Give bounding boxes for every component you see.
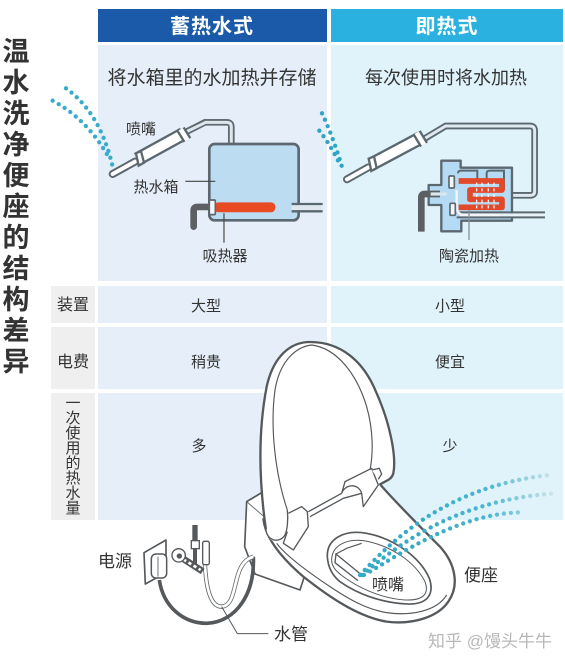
title: 水 — [2, 68, 30, 98]
inner chambers — [458, 171, 504, 190]
lid fill — [260, 342, 394, 543]
row: volume stored — [98, 393, 327, 520]
label: electricity cost: 电费 — [57, 353, 89, 371]
wall socket — [144, 540, 166, 584]
inlet pipe — [194, 207, 210, 227]
panel: stored hot water column — [98, 9, 327, 520]
heater — [214, 202, 275, 212]
nozzle — [113, 162, 135, 174]
label: hot water per use: 一 — [65, 395, 81, 412]
lower left arm — [266, 510, 288, 540]
nozzle — [347, 167, 368, 179]
title: 结 — [2, 254, 30, 284]
seat inner contour — [277, 543, 447, 614]
label: hot water per use: 量 — [65, 500, 81, 517]
label: hot water per use: 热 — [65, 470, 81, 487]
table values: 稍贵 — [191, 354, 221, 371]
table values: 多 — [191, 438, 207, 455]
watermark: 知乎 @馒头牛牛 — [428, 632, 552, 651]
label: hot water per use: 的 — [65, 455, 81, 472]
heater body — [429, 161, 512, 231]
labels: stored diagram: 热水箱 — [133, 179, 179, 196]
label: hot water per use: 次 — [65, 410, 81, 427]
labels: stored diagram — [126, 121, 248, 265]
spray nozzle arm — [335, 554, 362, 581]
seat — [263, 463, 455, 622]
valve — [187, 525, 203, 543]
row: size stored — [98, 286, 327, 323]
label: hot water per use: 水 — [65, 485, 81, 502]
lid inner contour — [273, 345, 372, 510]
title: 构 — [2, 285, 30, 315]
label: nozzle: 喷嘴 — [372, 576, 404, 594]
leader — [222, 607, 268, 634]
table values — [191, 298, 465, 455]
leaders — [185, 181, 224, 243]
column header: stored: 蓄热水式 — [170, 15, 254, 38]
icon: spray dots right — [319, 113, 343, 172]
title: 差 — [2, 316, 30, 346]
label: hot water per use: 使 — [65, 425, 81, 442]
icon: plumbing and power — [144, 525, 268, 634]
power cable — [159, 557, 253, 623]
pillars — [449, 176, 454, 188]
table values: 大型 — [191, 298, 221, 315]
label: device: 装置 — [57, 296, 89, 314]
panel body: instant — [331, 45, 563, 281]
label: hot water per use — [51, 393, 95, 520]
outer pipe — [425, 126, 535, 195]
title: 座 — [2, 192, 30, 222]
subtitle: stored: 将水箱里的水加热并存储 — [107, 67, 317, 89]
title: 净 — [2, 130, 30, 160]
icon: spray dots left — [53, 88, 113, 167]
column header: instant: 即热式 — [416, 15, 478, 38]
bowl opening — [327, 532, 431, 604]
label: water pipe: 水管 — [274, 625, 308, 644]
table values: 小型 — [435, 298, 465, 315]
icon: storage tank diagram — [53, 88, 323, 243]
title: 的 — [2, 223, 30, 253]
icon: instant heater diagram — [319, 113, 545, 240]
pipe up to nozzle — [187, 122, 231, 144]
label: power: 电源 — [98, 552, 132, 571]
panel body: stored — [98, 45, 327, 281]
icon: toilet seat — [245, 342, 557, 622]
table values: 便宜 — [435, 354, 465, 371]
title: 便 — [2, 161, 30, 191]
title: 洗 — [2, 99, 30, 129]
inlet pipe — [421, 194, 440, 232]
label: ceramic heater: 陶瓷加热 — [439, 248, 499, 265]
plug — [151, 554, 167, 578]
ceramic heating coil — [459, 181, 502, 207]
title: 温 — [2, 37, 30, 67]
table values: 少 — [442, 438, 458, 455]
title: 异 — [2, 347, 30, 377]
panel: instant heating column — [331, 9, 563, 520]
row: size instant — [331, 286, 563, 323]
row labels — [51, 286, 95, 520]
tank — [209, 144, 299, 220]
labels: stored diagram: 吸热器 — [202, 248, 248, 265]
hinge — [283, 468, 382, 550]
column header: stored — [98, 9, 327, 42]
row: cost instant — [331, 327, 563, 389]
label: device — [51, 286, 95, 323]
base — [245, 492, 330, 590]
label: seat: 便座 — [464, 566, 498, 585]
lid outline — [260, 342, 394, 530]
row: cost stored — [98, 327, 327, 389]
label: hot water per use: 用 — [65, 440, 81, 457]
title — [2, 37, 30, 377]
column header: instant — [331, 9, 563, 42]
leader — [467, 210, 471, 240]
outlet pipes — [460, 210, 545, 220]
row: volume instant — [331, 393, 563, 520]
water spray arcs — [360, 475, 557, 575]
water hose — [205, 553, 253, 607]
labels: stored diagram: 喷嘴 — [126, 121, 156, 138]
label: electricity cost — [51, 327, 95, 389]
subtitle: instant: 每次使用时将水加热 — [365, 68, 527, 88]
outlet pipe — [292, 200, 323, 216]
